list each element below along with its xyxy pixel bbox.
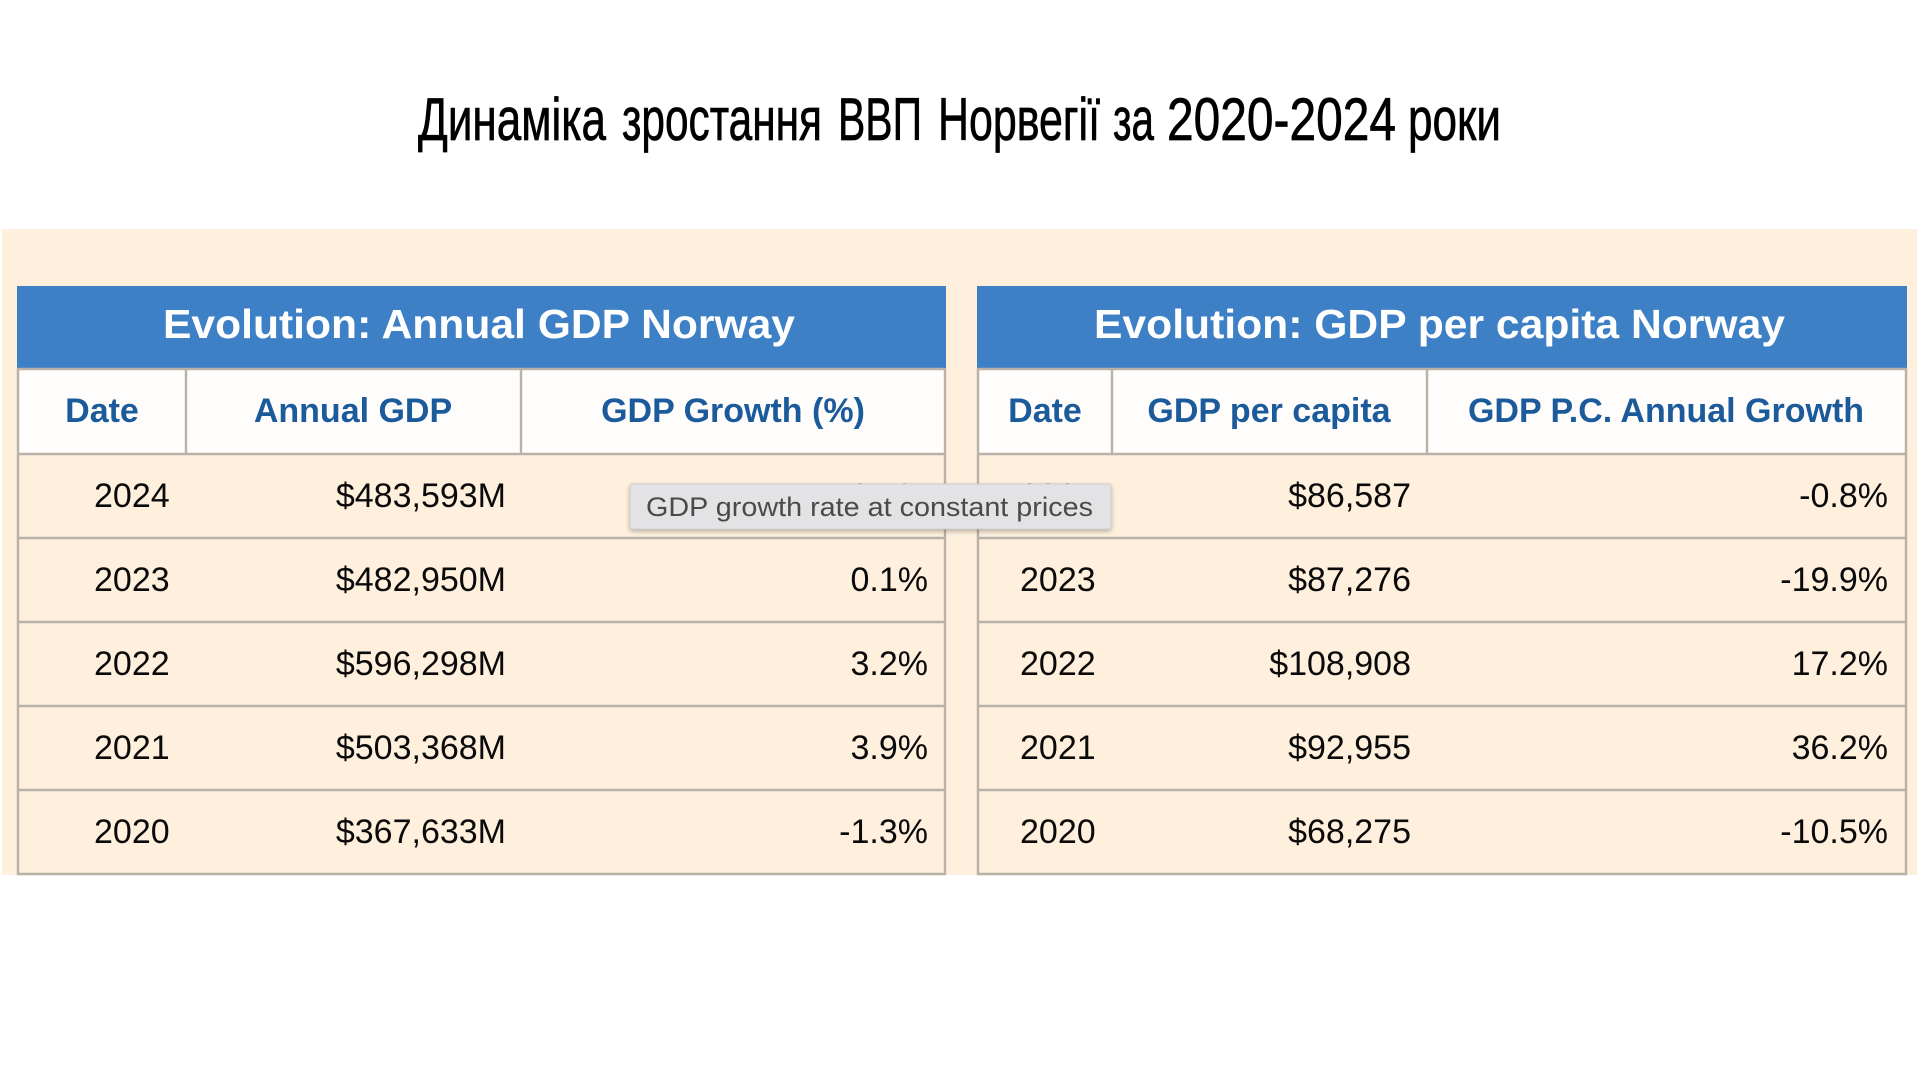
data rows: GDP per capita: 2022 bbox=[1020, 645, 1096, 683]
title bbox=[418, 86, 1501, 153]
title: ВВП bbox=[838, 86, 922, 153]
data rows: GDP per capita: $92,955 bbox=[1288, 729, 1411, 767]
data rows: annual GDP: 2022 bbox=[94, 645, 170, 683]
panel: background band bbox=[2, 229, 1917, 875]
data rows: annual GDP: 0.1% bbox=[850, 561, 928, 599]
data rows: GDP per capita: $108,908 bbox=[1269, 645, 1411, 683]
data rows: annual GDP: $503,368M bbox=[336, 729, 506, 767]
column headers: annual GDP: GDP Growth (%) bbox=[601, 392, 865, 430]
column headers: annual GDP: Annual GDP bbox=[254, 392, 452, 430]
panel: GDP per capita table bbox=[977, 286, 1907, 874]
title: за bbox=[1113, 86, 1154, 153]
data rows: annual GDP: 2020 bbox=[94, 813, 170, 851]
data rows: GDP per capita bbox=[1020, 477, 1888, 851]
title: роки bbox=[1408, 86, 1501, 153]
data rows: GDP per capita: -10.5% bbox=[1780, 813, 1888, 851]
data rows: annual GDP: $596,298M bbox=[336, 645, 506, 683]
data rows: annual GDP: 3.9% bbox=[850, 729, 928, 767]
data rows: annual GDP: 2.1% bbox=[850, 477, 928, 515]
table heading: annual GDP: Evolution: Annual GDP Norway bbox=[163, 301, 795, 347]
data rows: GDP per capita: -0.8% bbox=[1799, 477, 1888, 515]
table heading: GDP per capita: Evolution: GDP per capita Norway bbox=[1094, 301, 1785, 347]
data rows: annual GDP: 2023 bbox=[94, 561, 170, 599]
title: 2020-2024 bbox=[1167, 86, 1396, 153]
table heading: GDP per capita bbox=[977, 286, 1907, 368]
column headers: GDP per capita: Date bbox=[1008, 392, 1082, 430]
column headers: GDP per capita bbox=[978, 368, 1905, 454]
data rows: annual GDP: $483,593M bbox=[336, 477, 506, 515]
data rows: GDP per capita: 17.2% bbox=[1792, 645, 1888, 683]
data rows: annual GDP: 2024 bbox=[94, 477, 170, 515]
title: Норвегії bbox=[938, 86, 1100, 153]
data rows: annual GDP: 3.2% bbox=[850, 645, 928, 683]
column headers: GDP per capita: GDP P.C. Annual Growth bbox=[1468, 392, 1864, 430]
data rows: annual GDP: $482,950M bbox=[336, 561, 506, 599]
tooltip callout bbox=[630, 484, 1111, 529]
data rows: annual GDP: 2021 bbox=[94, 729, 170, 767]
title: Динаміка bbox=[418, 86, 606, 153]
column headers: annual GDP bbox=[18, 368, 945, 454]
data rows: GDP per capita: $68,275 bbox=[1288, 813, 1411, 851]
table heading: annual GDP bbox=[17, 286, 946, 368]
data rows: annual GDP bbox=[94, 477, 928, 851]
tooltip callout: GDP growth rate at constant prices bbox=[646, 492, 1093, 522]
column headers: GDP per capita: GDP per capita bbox=[1147, 392, 1392, 430]
data rows: GDP per capita: 2023 bbox=[1020, 561, 1096, 599]
data rows: GDP per capita: $86,587 bbox=[1288, 477, 1411, 515]
column headers: annual GDP: Date bbox=[65, 392, 139, 430]
data rows: GDP per capita: 2020 bbox=[1020, 813, 1096, 851]
data rows: GDP per capita: $87,276 bbox=[1288, 561, 1411, 599]
data rows: GDP per capita: 36.2% bbox=[1792, 729, 1888, 767]
data rows: GDP per capita: 2021 bbox=[1020, 729, 1096, 767]
title: зростання bbox=[622, 86, 822, 153]
data rows: annual GDP: $367,633M bbox=[336, 813, 506, 851]
panel: annual GDP table bbox=[17, 286, 946, 874]
data rows: GDP per capita: -19.9% bbox=[1780, 561, 1888, 599]
data rows: annual GDP: -1.3% bbox=[839, 813, 928, 851]
data rows: GDP per capita: 2024 bbox=[1020, 477, 1096, 515]
